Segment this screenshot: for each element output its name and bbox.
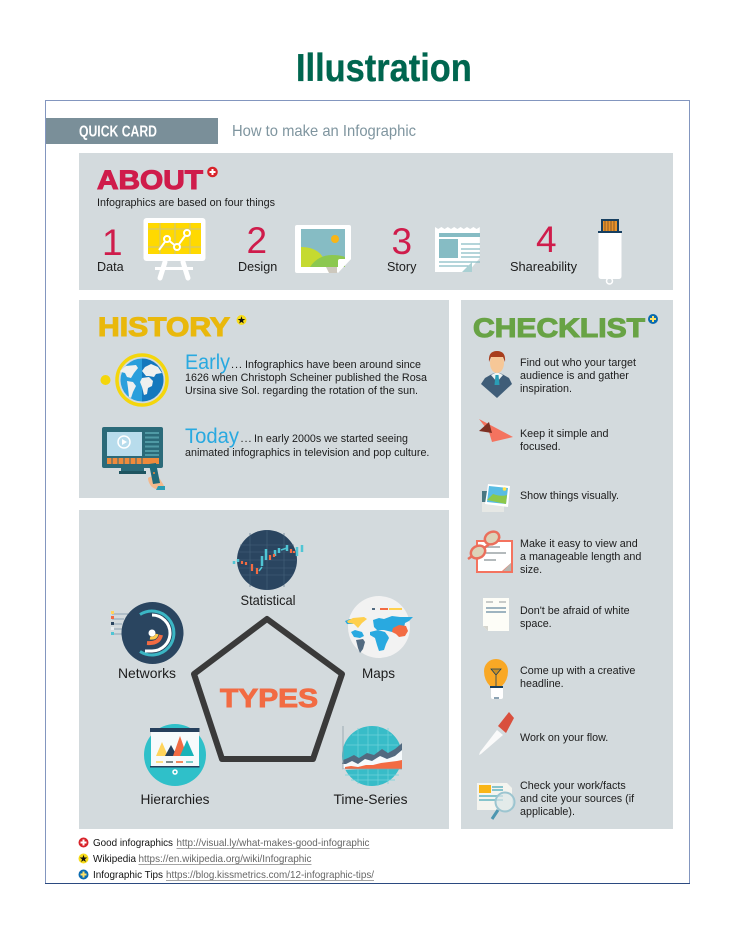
- item 2: design: Design: [238, 260, 277, 274]
- title: Illustration: [296, 46, 472, 89]
- pentagon: [194, 619, 342, 759]
- icon: usb stick: [598, 219, 622, 284]
- text: today: In early 2000s we started seeing: [254, 433, 408, 445]
- type: maps: [345, 596, 413, 681]
- icon: globe with sun orbit: [100, 355, 167, 405]
- check item: sources: and cite your sources (if: [520, 793, 634, 805]
- type: maps: Maps: [362, 666, 395, 681]
- check item: audience: [481, 351, 636, 398]
- check item: headline: Come up with a creative: [520, 665, 635, 677]
- check item: sources: applicable).: [520, 806, 575, 818]
- check item: white space: [483, 598, 630, 631]
- icon: red plus badge: [207, 167, 218, 177]
- heading: history: HISTORY: [98, 312, 230, 342]
- type: time-series: Time-Series: [334, 792, 408, 807]
- check item: simple: focused.: [520, 441, 561, 453]
- panel: checklist: [461, 300, 673, 829]
- check item: easy to view: size.: [520, 564, 542, 576]
- quick card header: QUICK CARD: [79, 124, 157, 140]
- item 1: data: 1: [102, 222, 123, 263]
- check item: flow: Work on your flow.: [520, 732, 608, 744]
- type: networks: Networks: [118, 666, 176, 681]
- heading: checklist: CHECKLIST: [473, 313, 646, 343]
- check item: sources: Check your work/facts: [520, 780, 626, 792]
- text: today: Today: [185, 424, 239, 448]
- source: infographic tips: Infographic Tips: [93, 869, 163, 881]
- check item: white space: space.: [520, 618, 552, 630]
- heading: types: TYPES: [220, 683, 318, 713]
- check item: easy to view: a manageable length and: [520, 551, 641, 563]
- sources list: [78, 837, 374, 881]
- check item: headline: [484, 659, 635, 699]
- source: wikipedia: ★: [79, 854, 88, 865]
- item 2: design: [238, 220, 351, 274]
- item 4: shareability: [510, 219, 622, 284]
- source: infographic tips: [78, 869, 374, 881]
- check item: easy to view: Make it easy to view and: [520, 538, 638, 550]
- item 1: data: Data: [97, 260, 124, 274]
- item 4: shareability: Shareability: [510, 260, 578, 274]
- icon: landscape photo: [295, 225, 351, 273]
- about intro text: Infographics are based on four things: [97, 197, 275, 209]
- source: good infographics: [78, 837, 370, 849]
- source: wikipedia: https://en.wikipedia.org/wiki/Infographic: [138, 853, 312, 865]
- panel: types: [79, 510, 449, 829]
- type: hierarchies: Hierarchies: [140, 792, 210, 807]
- type: networks: [111, 602, 184, 681]
- text: today: [185, 424, 429, 459]
- check item: visuals: Show things visually.: [520, 490, 619, 502]
- text: today: ...: [240, 433, 252, 445]
- text: early: [185, 350, 427, 397]
- item 3: story: 3: [392, 221, 412, 262]
- heading: about: ABOUT: [97, 165, 204, 195]
- icon: tv with remote: [102, 427, 165, 490]
- check item: sources: [477, 780, 634, 819]
- item 4: shareability: 4: [536, 219, 557, 260]
- source: infographic tips: https://blog.kissmetrics.com/12-infographic-tips/: [166, 869, 374, 881]
- check item: flow: [479, 712, 608, 755]
- check item: audience: Find out who your target: [520, 357, 636, 369]
- icon: yellow star badge: ★: [237, 316, 246, 326]
- check item: white space: Don't be afraid of white: [520, 605, 630, 617]
- check item: audience: audience is and gather: [520, 370, 629, 382]
- type: time-series: [334, 726, 408, 807]
- text: early: Infographics have been around since: [245, 359, 421, 371]
- text: today: animated infographics in television and pop culture.: [185, 447, 429, 459]
- item 3: story: Story: [387, 260, 417, 274]
- icon: blue plus badge: [648, 314, 658, 324]
- check item: simple: Keep it simple and: [520, 428, 608, 440]
- quick card header: [46, 118, 416, 144]
- icon: newspaper: [435, 227, 480, 272]
- check item: audience: inspiration.: [520, 383, 572, 395]
- type: hierarchies: [140, 724, 210, 807]
- type: statistical: Statistical: [240, 593, 296, 608]
- check item: visuals: [482, 484, 619, 512]
- source: good infographics: Good infographics: [93, 837, 173, 849]
- text: early: 1626 when Christoph Scheiner published the Rosa: [185, 372, 427, 384]
- panel: history: [79, 300, 449, 498]
- panel: about: [79, 153, 673, 290]
- source: wikipedia: Wikipedia: [93, 853, 136, 865]
- item 2: design: 2: [246, 220, 267, 261]
- text: early: Ursina sive Sol. regarding the rotation of the sun.: [185, 385, 418, 397]
- icon: chart on easel: [144, 218, 206, 278]
- item 1: data: [97, 218, 206, 278]
- source: good infographics: http://visual.ly/what-makes-good-infographic: [176, 837, 370, 849]
- text: early: Early: [185, 350, 230, 374]
- quick card header: How to make an Infographic: [232, 123, 416, 140]
- check item: easy to view: [468, 529, 641, 576]
- type: statistical: [234, 530, 302, 608]
- text: early: ...: [231, 359, 243, 371]
- check item: headline: headline.: [520, 678, 564, 690]
- card frame: [46, 100, 690, 884]
- check item: simple: [479, 419, 608, 453]
- item 3: story: [387, 221, 480, 274]
